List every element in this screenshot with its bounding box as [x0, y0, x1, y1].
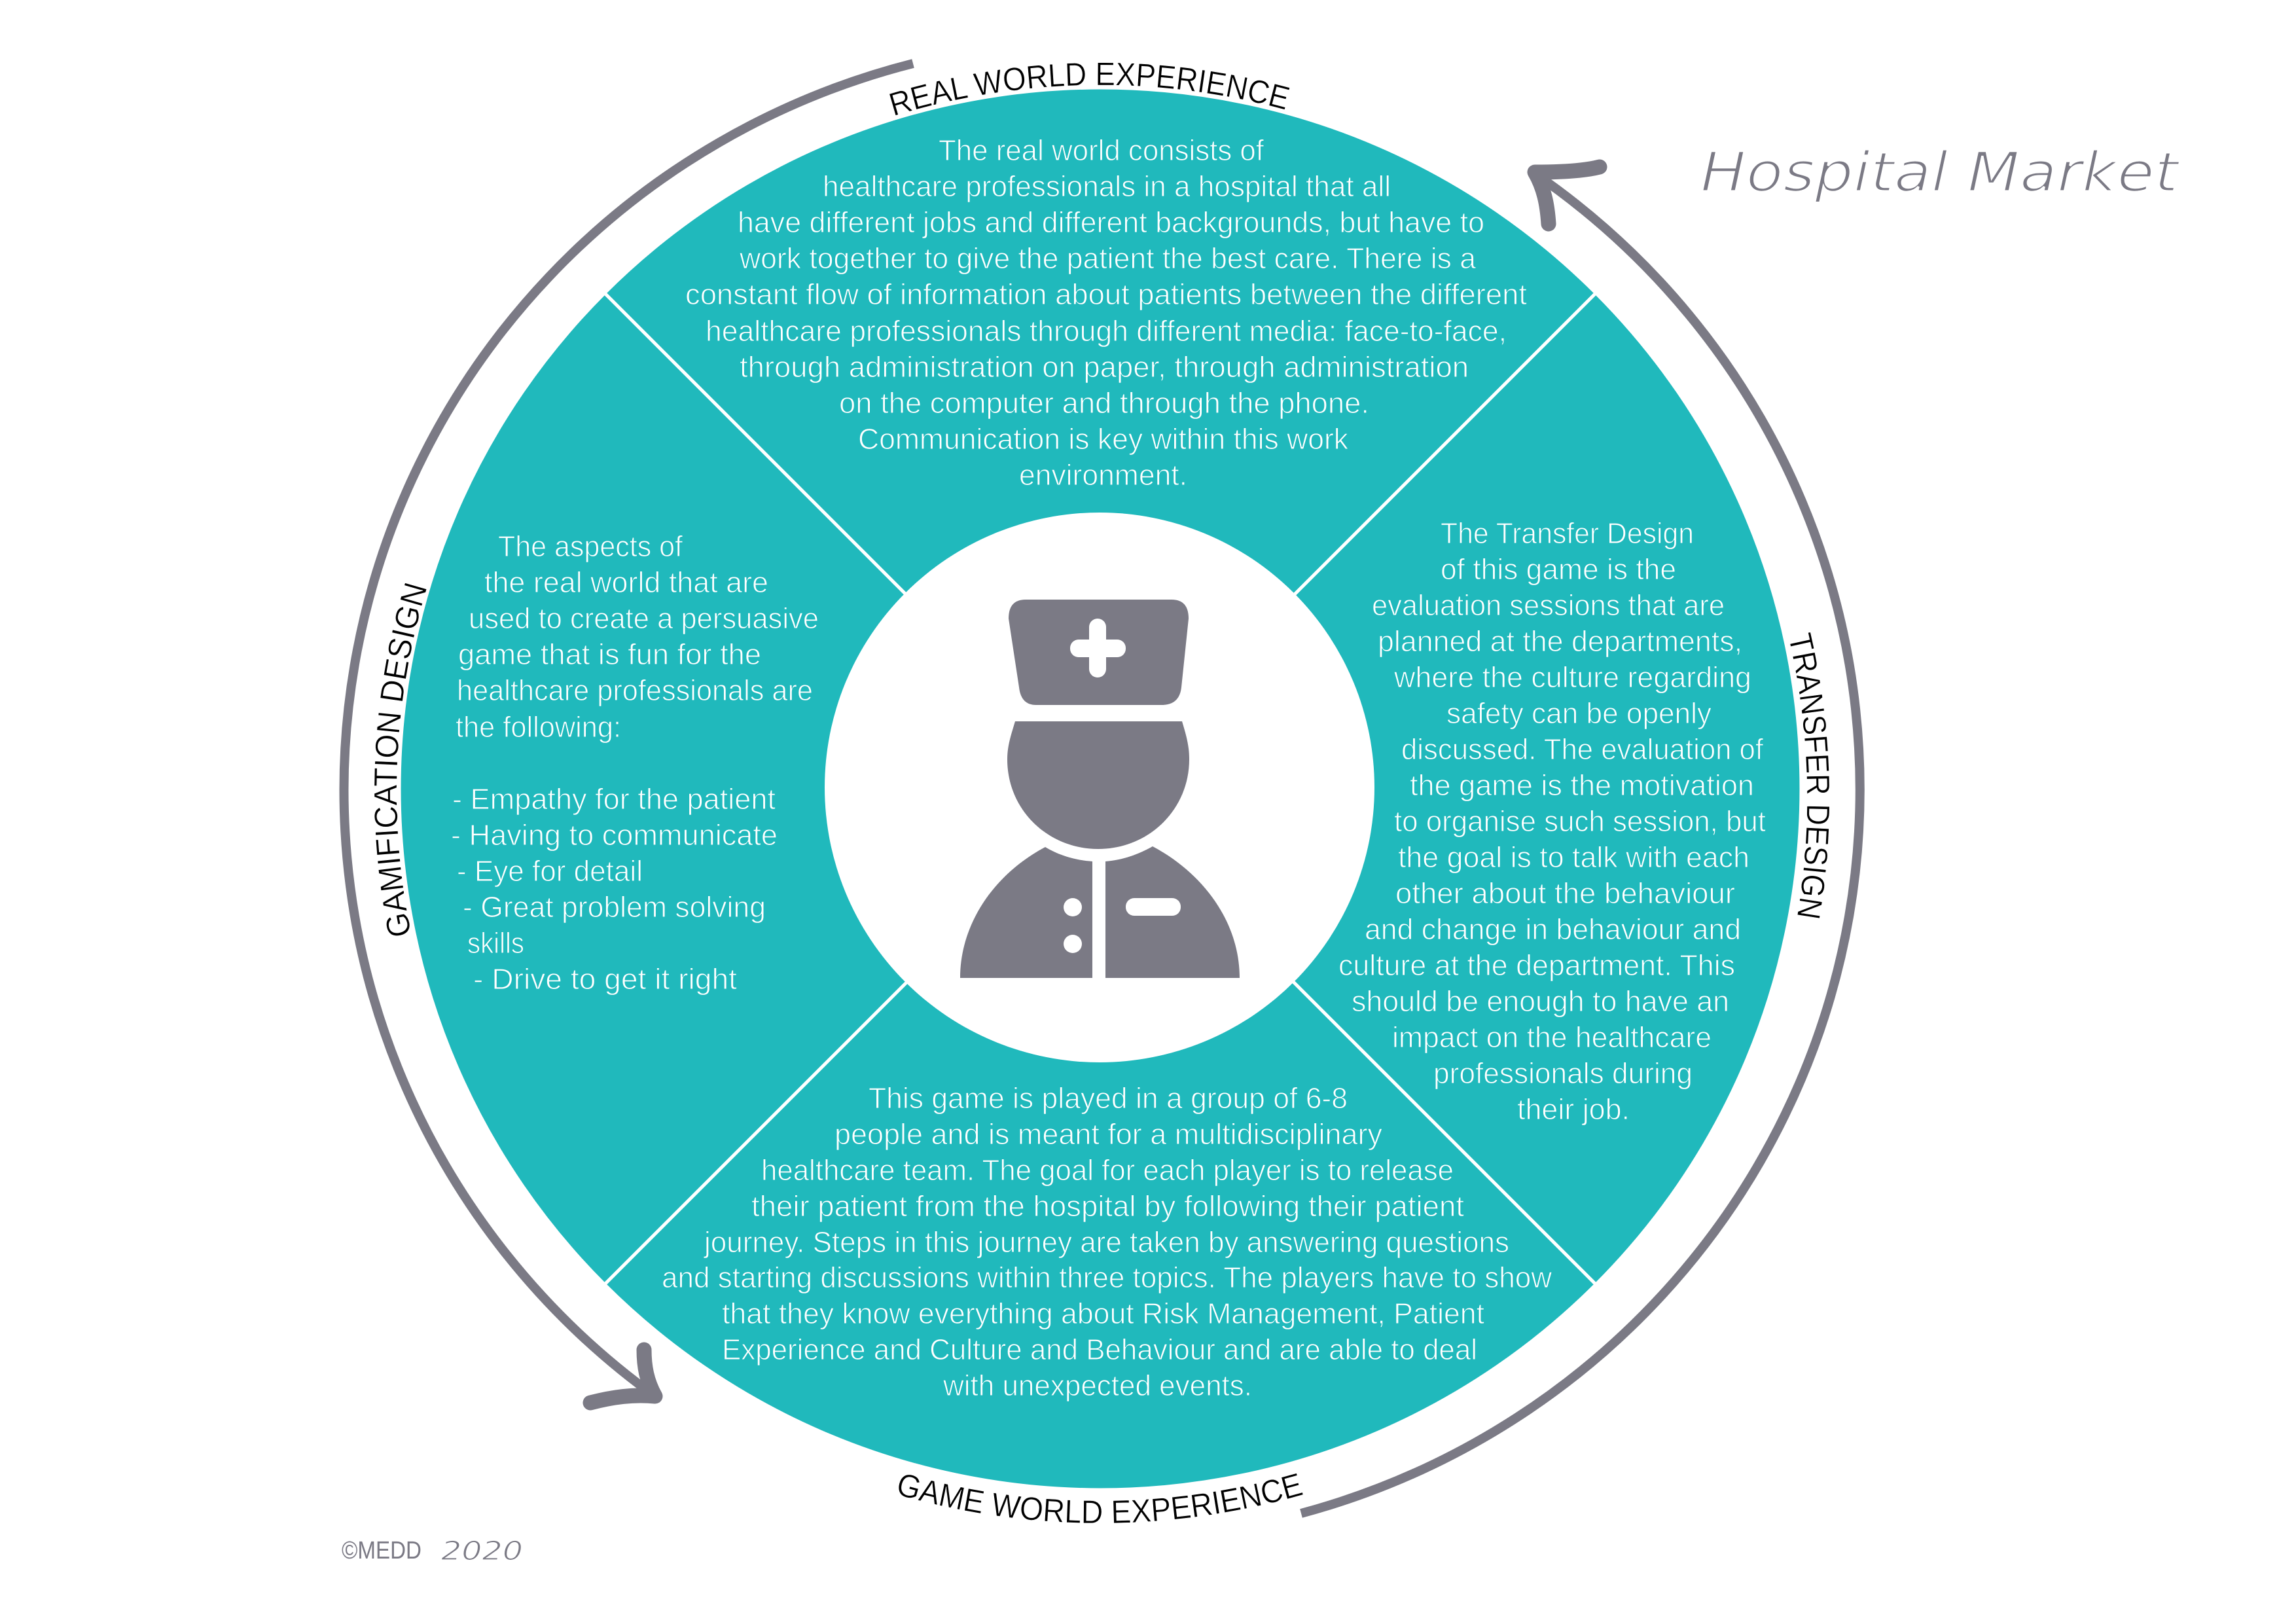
- text block: transfer description: safety can be openly: [1446, 696, 1712, 730]
- text block: real world description: work together to give the patient the best care. There is a: [739, 242, 1477, 275]
- text block: gamification description: the following:: [456, 710, 621, 744]
- icon: nurse: [960, 600, 1240, 978]
- icon: nurse head: [1007, 721, 1189, 849]
- text block: gamification description: the real world that are: [484, 566, 768, 599]
- title: hospital market: Hospital Market: [1700, 140, 2180, 204]
- text block: real world description: healthcare professionals in a hospital that all: [823, 170, 1391, 203]
- label: real world experience: REAL WORLD EXPERIENCE: [889, 63, 1289, 115]
- text block: transfer description: and change in behaviour and: [1365, 912, 1741, 946]
- panel: game world experience: [605, 789, 1596, 1490]
- text block: game world description: Experience and Culture and Behaviour and are able to deal: [722, 1333, 1477, 1366]
- label: game world experience: GAME WORLD EXPERIENCE: [899, 1473, 1303, 1523]
- text block: game world description: with unexpected events.: [942, 1369, 1252, 1402]
- text block: gamification description: - Great problem solving: [463, 890, 766, 924]
- white hub: [825, 513, 1374, 1062]
- label: transfer design: TRANSFER DESIGN: [1790, 632, 1829, 918]
- arrow: left cycle arc to game world: [344, 63, 913, 1403]
- text block: transfer description: the goal is to talk with each: [1398, 840, 1749, 874]
- text block: game world description: [662, 1081, 1552, 1402]
- center circle with nurse icon: [825, 513, 1374, 1062]
- sector: real world: [605, 88, 1596, 789]
- text block: transfer description: impact on the healthcare: [1392, 1020, 1712, 1054]
- text block: transfer description: evaluation sessions that are: [1372, 588, 1725, 622]
- text block: transfer description: should be enough to have an: [1352, 984, 1729, 1018]
- text block: gamification description: skills: [467, 926, 524, 960]
- text block: real world description: on the computer and through the phone.: [839, 386, 1369, 420]
- text block: gamification description: healthcare professionals are: [457, 674, 813, 707]
- label: gamification design: GAMIFICATION DESIGN: [374, 583, 427, 936]
- text block: game world description: people and is meant for a multidisciplinary: [834, 1117, 1382, 1151]
- text block: transfer description: The Transfer Design: [1441, 516, 1694, 550]
- text block: game world description: their patient from the hospital by following their patient: [751, 1189, 1465, 1223]
- text block: real world description: Communication is key within this work: [858, 422, 1348, 456]
- text block: real world description: constant flow of information about patients between the different: [685, 278, 1527, 311]
- text block: gamification description: game that is fun for the: [458, 638, 761, 671]
- sector: gamification: [399, 293, 1100, 1284]
- text block: transfer description: planned at the departments,: [1378, 624, 1742, 658]
- copyright holder: ©MEDD: [342, 1537, 422, 1564]
- arrow: right cycle arc to real world: [1301, 167, 1860, 1513]
- text block: transfer description: to organise such session, but: [1394, 804, 1766, 838]
- panel: gamification design: [399, 293, 1100, 1284]
- text block: gamification description: - Empathy for the patient: [452, 782, 776, 816]
- text block: game world description: journey. Steps in this journey are taken by answering questions: [703, 1225, 1509, 1259]
- text block: transfer description: where the culture regarding: [1393, 660, 1751, 694]
- text block: transfer description: of this game is the: [1441, 552, 1676, 586]
- text block: transfer description: culture at the department. This: [1338, 948, 1735, 982]
- year: 2020: [441, 1536, 523, 1566]
- text block: gamification description: - Drive to get it right: [473, 962, 737, 996]
- icon: nurse hat with cross: [1009, 600, 1189, 705]
- text block: real world description: environment.: [1019, 458, 1187, 492]
- text block: real world description: have different jobs and different backgrounds, but have to: [738, 206, 1484, 239]
- text block: transfer description: other about the behaviour: [1395, 876, 1735, 910]
- text block: real world description: The real world consists of: [939, 134, 1264, 167]
- text block: transfer description: [1338, 516, 1766, 1126]
- text block: gamification description: used to create a persuasive: [469, 602, 819, 635]
- panel: transfer design: [1100, 293, 1801, 1284]
- text block: game world description: healthcare team. The goal for each player is to release: [761, 1153, 1454, 1187]
- text block: transfer description: their job.: [1517, 1092, 1630, 1126]
- text block: transfer description: the game is the motivation: [1410, 768, 1754, 802]
- panel: real world experience: [605, 88, 1596, 789]
- text block: real world description: through administration on paper, through administration: [740, 350, 1469, 384]
- icon: nurse uniform: [960, 846, 1240, 978]
- text block: game world description: This game is played in a group of 6-8: [869, 1081, 1348, 1115]
- text block: real world description: healthcare professionals through different media: face-to-face,: [706, 314, 1507, 348]
- text block: real world description: [685, 134, 1527, 492]
- text block: gamification description: The aspects of: [498, 530, 683, 563]
- copyright: [342, 1536, 523, 1566]
- text block: gamification description: - Having to communicate: [451, 818, 778, 852]
- text block: game world description: and starting discussions within three topics. The players have to show: [662, 1261, 1552, 1294]
- text block: gamification description: [451, 530, 819, 996]
- text block: transfer description: professionals during: [1433, 1056, 1693, 1090]
- sector: transfer: [1100, 293, 1801, 1284]
- sector: game world: [605, 789, 1596, 1490]
- text block: game world description: that they know everything about Risk Management, Patient: [722, 1297, 1484, 1330]
- text block: gamification description: - Eye for detail: [457, 854, 643, 888]
- text block: transfer description: discussed. The evaluation of: [1401, 732, 1763, 766]
